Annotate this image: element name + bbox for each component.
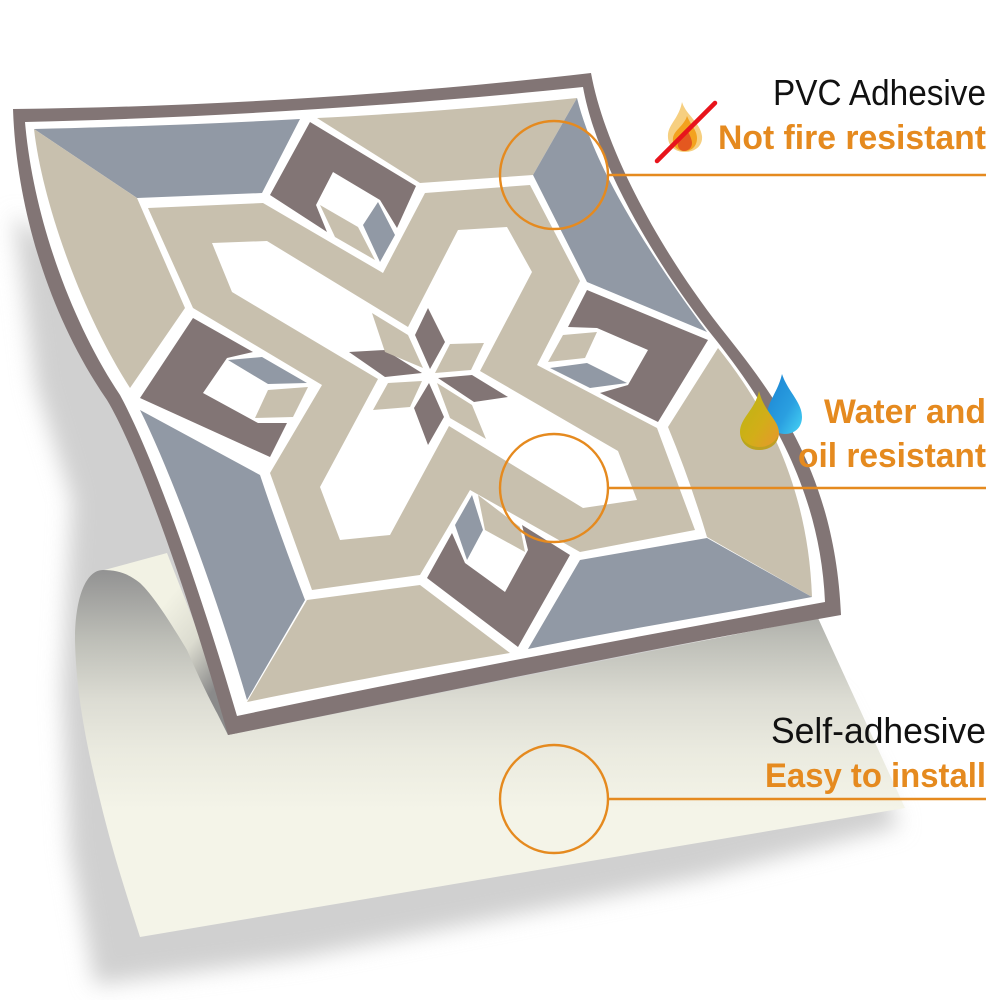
text: Not fire resistant: Not fire resistant xyxy=(718,119,986,157)
text: PVC Adhesive: PVC Adhesive xyxy=(773,72,986,113)
tan star frame xyxy=(148,185,695,590)
center star xyxy=(349,308,508,445)
text: oil resistant: oil resistant xyxy=(798,437,986,475)
tan panel left xyxy=(34,129,185,388)
white cross xyxy=(212,227,637,540)
curl back side xyxy=(97,553,240,740)
callout: self-adhesive xyxy=(500,710,986,853)
gray corner top-right xyxy=(533,98,707,332)
callout circle and leader line xyxy=(500,745,986,853)
icon: flame crossed out xyxy=(657,102,715,161)
left brown cube block xyxy=(140,318,308,457)
drop shadow xyxy=(14,215,900,985)
white inner border xyxy=(25,87,825,716)
text: Self-adhesive: Self-adhesive xyxy=(771,710,986,751)
icon: water and oil drops xyxy=(740,374,802,450)
tan panel bottom xyxy=(247,585,510,702)
text: Easy to install: Easy to install xyxy=(765,757,986,795)
gray corner bottom-left xyxy=(140,410,305,700)
bottom brown cube block xyxy=(427,495,570,647)
brown border xyxy=(13,73,841,735)
paper front with curl xyxy=(75,570,905,937)
gray corner top-left xyxy=(34,119,300,198)
gray corner bottom-right xyxy=(528,538,812,649)
callout: PVC adhesive xyxy=(500,72,986,229)
tile sticker xyxy=(13,73,841,735)
callout circle and leader line xyxy=(500,121,986,229)
callout: water and oil resistant xyxy=(500,374,986,542)
tan panel top xyxy=(317,98,577,183)
callout circle and leader line xyxy=(500,434,986,542)
top brown cube block xyxy=(270,122,416,262)
backing paper xyxy=(75,553,905,937)
tan panel right xyxy=(668,348,812,597)
text: Water and: Water and xyxy=(824,393,986,431)
right brown cube block xyxy=(548,290,708,422)
